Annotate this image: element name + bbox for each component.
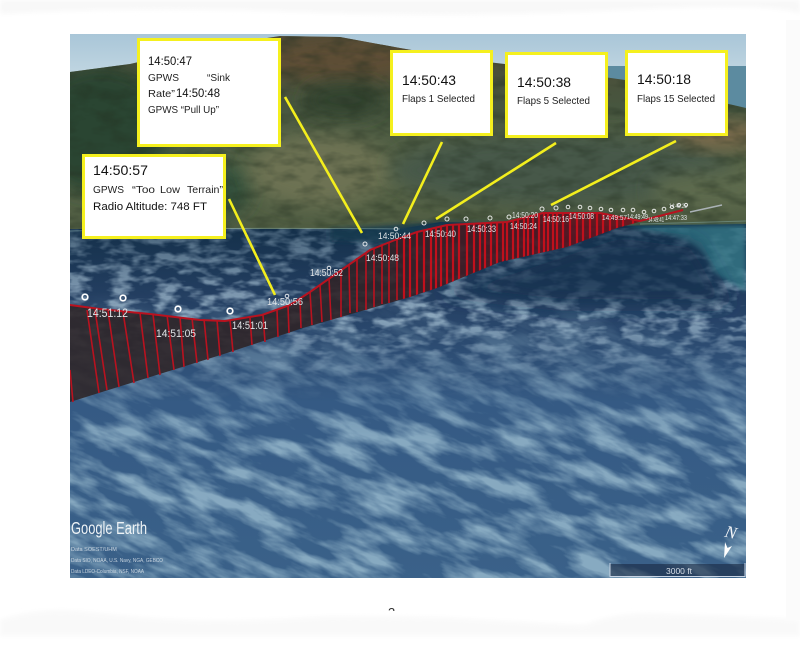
track time labels: 14:50:20 (512, 210, 538, 220)
callout: 14:50:47 sink rate and pull up (138, 40, 280, 146)
callout: 14:50:43 flaps 1: 14:50:43 (402, 72, 456, 88)
track time labels: 14:49:41 (648, 217, 664, 224)
curtain top edge (70, 210, 683, 321)
image data credits: Data SIO, NOAA, U.S. Navy, NGA, GEBCO (71, 558, 164, 564)
callout: 14:50:38 flaps 5: 14:50:38 (517, 74, 571, 90)
track time labels: 14:50:56 (267, 297, 303, 308)
distant sea on the horizon (608, 66, 746, 108)
callout: 14:50:47 sink rate and pull up: GPWS (148, 72, 179, 84)
callout: 14:50:47 sink rate and pull up: 14:50:48 (176, 88, 220, 100)
leader line: sink rate (285, 97, 362, 233)
callout: 14:50:43 flaps 1 (392, 52, 492, 134)
track time labels: 14:50:24 (510, 221, 537, 231)
track time labels: 14:50:08 (569, 211, 594, 221)
track time labels: 14:47:33 (665, 215, 687, 222)
mountain terrain (70, 36, 746, 229)
track time labels: 14:50:40 (425, 229, 456, 239)
track time labels: 14:50:48 (366, 253, 399, 264)
callout: 14:50:47 sink rate and pull up: “Sink (207, 72, 231, 84)
north arrow (724, 526, 738, 558)
callout: 14:50:57 too low terrain: Radio Altitude: 748 FT (93, 201, 207, 213)
track time labels: 14:51:05 (156, 328, 196, 340)
track point markers (82, 203, 688, 314)
track time labels: 14:49:57 (602, 213, 627, 222)
Google Earth wordmark: Google Earth (71, 518, 147, 538)
image data credits: Data SOEST/UHM (71, 547, 117, 553)
callout: 14:50:18 flaps 15: Flaps 15 Selected (637, 93, 715, 105)
coastline surf (70, 221, 746, 231)
satellite image panel (30, 34, 770, 578)
callout: 14:50:43 flaps 1: Flaps 1 Selected (402, 93, 475, 105)
callout: 14:50:38 flaps 5: Flaps 5 Selected (517, 95, 590, 107)
curtain drop lines (70, 239, 397, 402)
callout: 14:50:57 too low terrain: “Too (132, 184, 155, 196)
image data credits (71, 547, 164, 575)
leader line: flaps 5 (436, 143, 556, 219)
callout: 14:50:47 sink rate and pull up: Rate” (148, 88, 176, 100)
track time labels: 14:50:33 (467, 224, 496, 234)
page number: 3 (388, 605, 395, 620)
callout: 14:50:57 too low terrain (84, 156, 224, 238)
image data credits: Data LDEO-Columbia, NSF, NOAA (71, 569, 144, 575)
annotated flight path infographic (70, 34, 746, 611)
runway (690, 205, 722, 212)
callout: 14:50:18 flaps 15 (626, 52, 726, 134)
flight path curtain (70, 200, 683, 402)
leader line: too low terrain (229, 199, 275, 295)
track time labels: 14:48:25 (669, 203, 687, 210)
track time labels: 14:50:52 (310, 268, 343, 279)
sky (70, 34, 746, 72)
track time labels (87, 203, 687, 340)
shallow coastal water (625, 225, 746, 292)
callout: 14:50:57 too low terrain: 14:50:57 (93, 162, 148, 178)
track time labels: 14:49:49 (627, 212, 648, 221)
scale bar: 3000 ft (666, 566, 693, 576)
track time labels: 14:50:16 (543, 214, 569, 224)
ocean with cloud reflections (70, 222, 746, 578)
north arrow: N (722, 522, 740, 543)
deep shadow water below the track (440, 232, 730, 305)
callout: 14:50:57 too low terrain: GPWS (93, 184, 124, 196)
scale bar (610, 563, 745, 576)
callout: 14:50:47 sink rate and pull up: 14:50:47 (148, 56, 192, 68)
callout: 14:50:47 sink rate and pull up: GPWS “Pull Up” (148, 104, 219, 116)
dark nearshore water (328, 220, 500, 246)
leader line: flaps 1 (403, 142, 442, 224)
track time labels: 14:50:44 (378, 231, 411, 242)
callout: 14:50:18 flaps 15: 14:50:18 (637, 71, 691, 87)
track time labels: 14:51:01 (232, 320, 268, 332)
callout: 14:50:57 too low terrain: Terrain” (187, 184, 224, 196)
leader line: flaps 15 (551, 141, 676, 205)
callout: 14:50:38 flaps 5 (506, 54, 606, 136)
track time labels: 14:51:12 (87, 306, 128, 320)
callout: 14:50:57 too low terrain: Low (160, 184, 180, 196)
